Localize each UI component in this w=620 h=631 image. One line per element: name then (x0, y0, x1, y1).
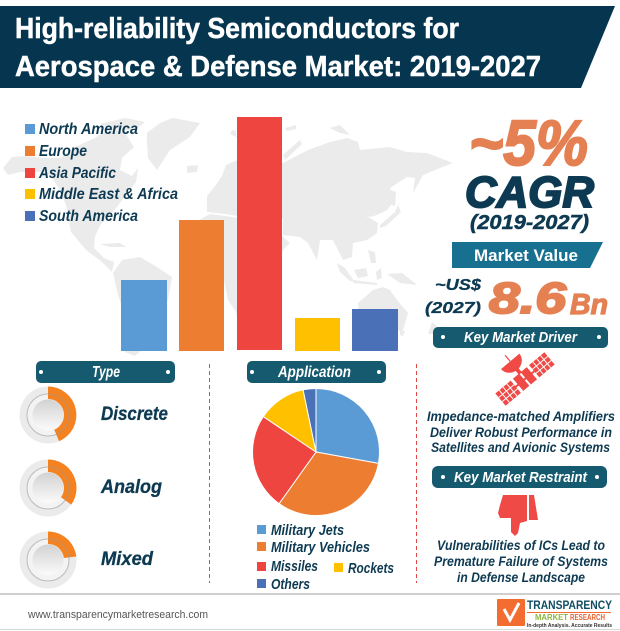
market value figure: ~US$ (435, 277, 482, 294)
CAGR callout: (2019-2027) (470, 212, 589, 234)
restraint text: in Defense Landscape (457, 570, 585, 585)
market value banner (452, 242, 603, 268)
driver text (427, 409, 615, 455)
region legend: Europe (39, 143, 87, 160)
pie chart (253, 388, 380, 516)
restraint text: Premature Failure of Systems (434, 554, 608, 569)
pill: application: Application (277, 364, 351, 381)
application legend: Rockets (348, 561, 394, 577)
pill: application (247, 361, 386, 383)
donut: analog (20, 459, 162, 516)
region legend: Asia Pacific (38, 165, 116, 182)
logo (497, 598, 612, 629)
restraint text (434, 538, 608, 585)
website url: www.transparencymarketresearch.com (27, 609, 208, 621)
donut: mixed: Mixed (101, 549, 153, 570)
application legend (257, 523, 394, 593)
donut: discrete (20, 386, 168, 444)
pill: key market driver (433, 327, 608, 348)
restraint text: Vulnerabilities of ICs Lead to (437, 538, 605, 553)
title banner: High-reliability Semiconductors for (15, 13, 459, 45)
donut: discrete: Discrete (101, 404, 168, 425)
world map background (3, 118, 453, 356)
bar chart (121, 117, 398, 351)
market value figure: Bn (570, 289, 608, 321)
donut: mixed (20, 532, 153, 588)
region legend: North America (39, 121, 138, 138)
application legend: Missiles (271, 559, 318, 575)
pill: key market restraint: Key Market Restraint (454, 469, 588, 486)
logo: RESEARCH (570, 613, 605, 622)
pill: type (36, 361, 175, 383)
title banner: Aerospace & Defense Market: 2019-2027 (15, 51, 541, 83)
icon: thumbs down (498, 495, 538, 536)
logo: MARKET (535, 613, 568, 622)
pill: key market driver: Key Market Driver (464, 330, 578, 346)
icon: satellite (481, 335, 555, 406)
CAGR callout: ~5% (469, 107, 588, 179)
logo: In-depth Analysis. Accurate Results (527, 623, 612, 629)
application legend: Military Jets (271, 523, 344, 539)
market value figure: 8.6 (489, 274, 567, 323)
application legend: Military Vehicles (271, 540, 370, 556)
title banner (0, 6, 615, 88)
region legend (25, 121, 178, 225)
application legend: Others (271, 577, 310, 593)
donut: analog: Analog (100, 477, 162, 498)
region legend: South America (39, 208, 138, 225)
market value figure: (2027) (425, 300, 481, 317)
market value banner: Market Value (474, 246, 578, 265)
pill: key market restraint (432, 466, 607, 488)
CAGR callout: CAGR (465, 168, 594, 217)
region legend: Middle East & Africa (39, 186, 178, 203)
market value figure (425, 274, 608, 323)
CAGR callout (465, 107, 594, 234)
pill: type: Type (92, 364, 120, 381)
